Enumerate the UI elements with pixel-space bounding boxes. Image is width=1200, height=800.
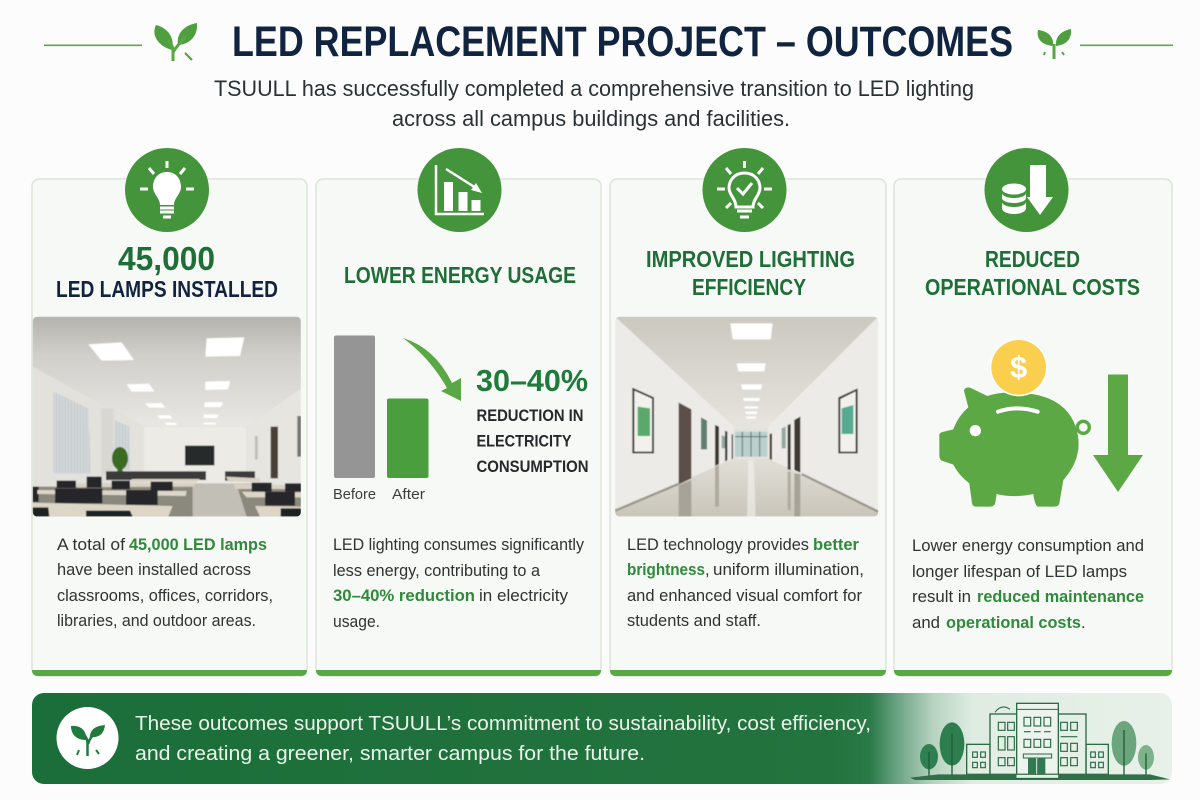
body text bbox=[57, 536, 273, 630]
subtitle: across all campus buildings and facilities. bbox=[392, 106, 790, 131]
icon: bulb with check bbox=[702, 148, 786, 232]
icon: coins and down arrow bbox=[984, 148, 1068, 232]
body text: have been installed across bbox=[57, 561, 251, 579]
icon: piggy bank with coin: $ bbox=[1010, 351, 1027, 385]
body text: usage. bbox=[333, 613, 380, 631]
stat caption: REDUCTION IN bbox=[476, 407, 584, 425]
stat: 30–40%: 30–40% bbox=[476, 363, 588, 398]
heading: improved lighting efficiency: EFFICIENCY bbox=[692, 274, 806, 300]
stat caption: CONSUMPTION bbox=[476, 458, 588, 476]
icon: light bulb bbox=[125, 148, 209, 232]
icon: leaf right bbox=[1038, 29, 1071, 59]
body text: uniform illumination, bbox=[713, 561, 864, 579]
body text: Lower energy consumption and bbox=[912, 537, 1144, 555]
heading: improved lighting efficiency bbox=[646, 246, 855, 300]
body text: A total of bbox=[57, 536, 125, 554]
heading: improved lighting efficiency: IMPROVED LIGHTING bbox=[646, 246, 855, 272]
photo: corridor bbox=[615, 317, 878, 517]
body text: in electricity bbox=[479, 587, 569, 605]
arrow: reduction bbox=[403, 338, 461, 401]
illustration: campus building and trees bbox=[910, 703, 1170, 780]
body text bbox=[912, 537, 1144, 632]
icon: piggy bank with coin bbox=[939, 338, 1089, 507]
subtitle: TSUULL has successfully completed a comprehensive transition to LED lighting bbox=[214, 76, 974, 101]
body text: . bbox=[1081, 614, 1086, 632]
panel: reduced operational costs bbox=[894, 148, 1172, 676]
body text: and enhanced visual comfort for bbox=[627, 587, 862, 605]
heading: reduced operational costs: OPERATIONAL COSTS bbox=[925, 274, 1140, 300]
closing statement: and creating a greener, smarter campus for the future. bbox=[135, 742, 645, 765]
body text: 45,000 LED lamps bbox=[129, 536, 267, 554]
stat: 45,000: 45,000 bbox=[118, 240, 215, 277]
body text: and bbox=[912, 614, 940, 632]
icon: leaf left bbox=[154, 23, 197, 61]
body text: LED lighting consumes significantly bbox=[333, 536, 585, 554]
stat caption: ELECTRICITY bbox=[476, 432, 572, 450]
bar chart: before and after: Before bbox=[333, 486, 376, 503]
heading: reduced operational costs: REDUCED bbox=[985, 246, 1080, 272]
title: LED REPLACEMENT PROJECT – OUTCOMES bbox=[232, 18, 1013, 66]
stat caption bbox=[476, 407, 588, 476]
body text: reduced maintenance bbox=[977, 588, 1144, 606]
bar chart: before and after bbox=[333, 336, 428, 503]
panel: improved lighting efficiency bbox=[610, 148, 886, 676]
panel: LED lamps installed bbox=[32, 148, 307, 676]
body text: students and staff. bbox=[627, 612, 761, 630]
body text: , bbox=[705, 561, 710, 579]
heading: LED lamps installed: LED LAMPS INSTALLED bbox=[56, 276, 278, 302]
icon: sprout badge bbox=[56, 707, 118, 769]
photo: classroom bbox=[33, 317, 301, 517]
icon: falling bar chart bbox=[418, 148, 502, 232]
arrow: costs down bbox=[1093, 374, 1143, 492]
subtitle bbox=[214, 76, 974, 131]
body text: 30–40% reduction bbox=[333, 587, 475, 605]
body text: better bbox=[813, 536, 860, 554]
body text: operational costs bbox=[946, 614, 1081, 632]
body text: libraries, and outdoor areas. bbox=[57, 612, 256, 630]
panel: lower energy usage bbox=[316, 148, 601, 676]
body text: less energy, contributing to a bbox=[333, 562, 541, 580]
footer banner bbox=[32, 693, 1172, 784]
body text: result in bbox=[912, 588, 971, 606]
heading: lower energy usage: LOWER ENERGY USAGE bbox=[344, 262, 576, 288]
body text bbox=[333, 536, 585, 631]
header divider right bbox=[1080, 44, 1173, 46]
closing statement bbox=[135, 712, 871, 765]
body text: brightness bbox=[627, 561, 705, 579]
closing statement: These outcomes support TSUULL’s commitment to sustainability, cost efficiency, bbox=[135, 712, 871, 735]
body text: LED technology provides bbox=[627, 536, 809, 554]
header divider left bbox=[44, 44, 142, 46]
body text bbox=[627, 536, 864, 630]
bar chart: before and after: After bbox=[392, 486, 425, 503]
heading: reduced operational costs bbox=[925, 246, 1140, 300]
body text: classrooms, offices, corridors, bbox=[57, 587, 273, 605]
body text: longer lifespan of LED lamps bbox=[912, 563, 1127, 581]
